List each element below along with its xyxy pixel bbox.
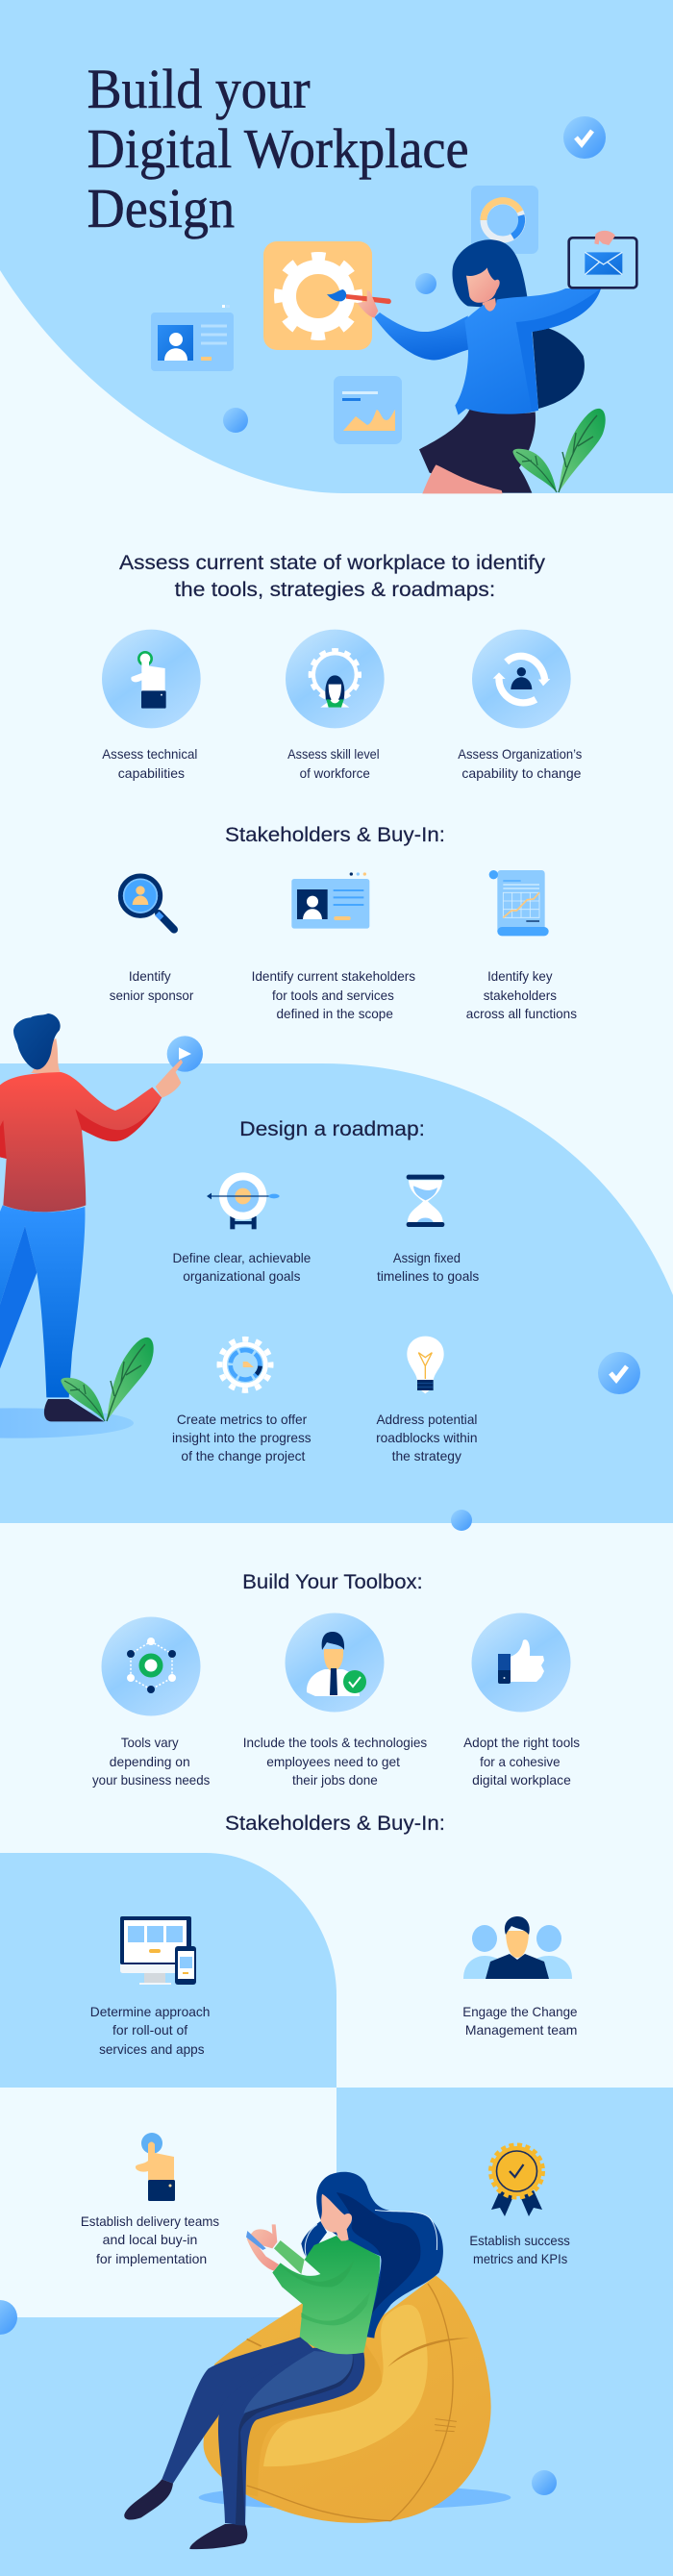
captions: roadmap: of the change project <box>181 1448 306 1463</box>
captions: roadmap: organizational goals <box>183 1268 300 1284</box>
captions: toolbox: digital workplace <box>472 1772 571 1788</box>
decorative dot <box>223 408 248 433</box>
captions: quadrant bottom: metrics and KPIs <box>473 2251 567 2266</box>
icon: stakeholder id card <box>291 872 369 929</box>
captions: roadmap: timelines to goals <box>377 1268 479 1284</box>
panel: roadmap background <box>0 1063 673 1523</box>
captions: roadmap: Create metrics to offer <box>177 1412 308 1427</box>
panel: quadrant top left <box>0 1853 336 2088</box>
captions: toolbox <box>92 1735 580 1788</box>
icon: magnifier <box>120 876 174 930</box>
captions: stakeholders row: stakeholders <box>484 988 557 1003</box>
captions: quadrant top: Determine approach <box>90 2004 210 2019</box>
icon: change management team <box>463 1916 572 1979</box>
captions: stakeholders row: Identify key <box>487 968 552 984</box>
captions: quadrant top <box>90 2004 578 2057</box>
icon: hero check badge <box>563 116 606 159</box>
captions: quadrant top: for roll-out of <box>112 2022 187 2038</box>
card: area chart <box>334 376 402 444</box>
captions: stakeholders row: Identify <box>129 968 171 984</box>
captions: roadmap: Assign fixed <box>393 1250 461 1265</box>
icon: gauge gear <box>219 1339 271 1390</box>
captions: assess row: of workforce <box>300 765 370 781</box>
illustration: roadmap plant <box>61 1338 154 1421</box>
captions: stakeholders row: for tools and services <box>272 988 394 1003</box>
icon: technical capabilities hand <box>102 630 201 728</box>
captions: assess row: Assess Organization’s <box>458 746 582 762</box>
heading: assess: Assess current state of workplace to identify <box>119 552 546 574</box>
icon: success medal <box>490 2145 542 2216</box>
decorative dot <box>451 1510 472 1531</box>
captions: roadmap: Define clear, achievable <box>173 1250 311 1265</box>
captions: toolbox: employees need to get <box>266 1754 400 1769</box>
captions: roadmap: roadblocks within <box>376 1430 477 1445</box>
icon: target <box>207 1172 280 1229</box>
icon: delivery hand <box>136 2133 175 2201</box>
captions: toolbox: for a cohesive <box>480 1754 561 1769</box>
decorative dot <box>415 273 436 294</box>
icon: employee with check <box>285 1613 385 1712</box>
captions: quadrant bottom: Establish success <box>469 2233 570 2248</box>
card: profile id <box>151 305 234 371</box>
captions: stakeholders row: across all functions <box>466 1006 577 1021</box>
captions: stakeholders row: senior sponsor <box>110 988 194 1003</box>
heading: assess: the tools, strategies & roadmaps: <box>175 579 495 601</box>
heading: build your toolbox: Build Your Toolbox: <box>242 1571 423 1593</box>
icon: hourglass <box>407 1175 444 1227</box>
captions: roadmap: insight into the progress <box>172 1430 312 1445</box>
captions: toolbox: Include the tools & technologies <box>243 1735 427 1750</box>
icon: scroll chart <box>489 870 549 936</box>
panel: quadrant bottom right and footer <box>0 2088 673 2576</box>
captions: toolbox: their jobs done <box>292 1772 378 1788</box>
heading: assess <box>119 552 546 601</box>
decorative dot <box>0 2300 17 2335</box>
panel: hero background <box>0 0 673 493</box>
captions: roadmap: Address potential <box>377 1412 477 1427</box>
captions: quadrant top: Engage the Change <box>462 2004 578 2019</box>
title <box>87 58 469 239</box>
heading: design a roadmap: Design a roadmap: <box>239 1118 425 1140</box>
captions: roadmap <box>172 1250 479 1463</box>
icon: skill level gear person <box>286 630 385 728</box>
illustration: woman on beanbag <box>124 2172 511 2549</box>
captions: assess row: capabilities <box>118 765 185 781</box>
icon: network hexagon <box>102 1617 200 1715</box>
heading: stakeholders: Stakeholders & Buy-In: <box>225 824 445 846</box>
captions: assess row <box>102 746 582 781</box>
captions: assess row: capability to change <box>461 765 582 781</box>
icon: light bulb <box>407 1337 444 1393</box>
captions: roadmap: the strategy <box>392 1448 461 1463</box>
illustration: man pointing at play button <box>0 1013 203 1438</box>
captions: quadrant top: Management team <box>465 2022 577 2038</box>
title: Build your <box>87 58 311 120</box>
illustration: hero plant <box>512 409 606 492</box>
decorative dot <box>532 2470 557 2495</box>
captions: toolbox: Adopt the right tools <box>463 1735 580 1750</box>
captions: quadrant top: services and apps <box>99 2041 204 2057</box>
icon: roadmap check badge <box>598 1352 640 1394</box>
captions: stakeholders row: Identify current stakeholders <box>252 968 415 984</box>
captions: assess row: Assess skill level <box>287 746 380 762</box>
illustration: woman with tablet <box>327 231 636 493</box>
icon: monitor and phone <box>120 1916 196 1985</box>
captions: quadrant bottom <box>81 2213 570 2266</box>
captions: toolbox: depending on <box>110 1754 190 1769</box>
captions: stakeholders row <box>110 968 577 1021</box>
captions: quadrant bottom: for implementation <box>96 2251 207 2266</box>
title: Digital Workplace <box>87 117 469 180</box>
card: donut chart <box>471 186 538 254</box>
captions: toolbox: your business needs <box>92 1772 210 1788</box>
captions: quadrant bottom: and local buy-in <box>103 2232 197 2247</box>
captions: toolbox: Tools vary <box>121 1735 179 1750</box>
title: Design <box>87 177 235 239</box>
captions: stakeholders row: defined in the scope <box>277 1006 393 1021</box>
captions: assess row: Assess technical <box>102 746 197 762</box>
captions: quadrant bottom: Establish delivery teams <box>81 2213 219 2229</box>
card: orange gear tile <box>263 241 372 350</box>
icon: change capability arrows <box>472 630 571 728</box>
icon: thumbs up <box>471 1613 571 1712</box>
heading: stakeholders 2: Stakeholders & Buy-In: <box>225 1813 445 1835</box>
